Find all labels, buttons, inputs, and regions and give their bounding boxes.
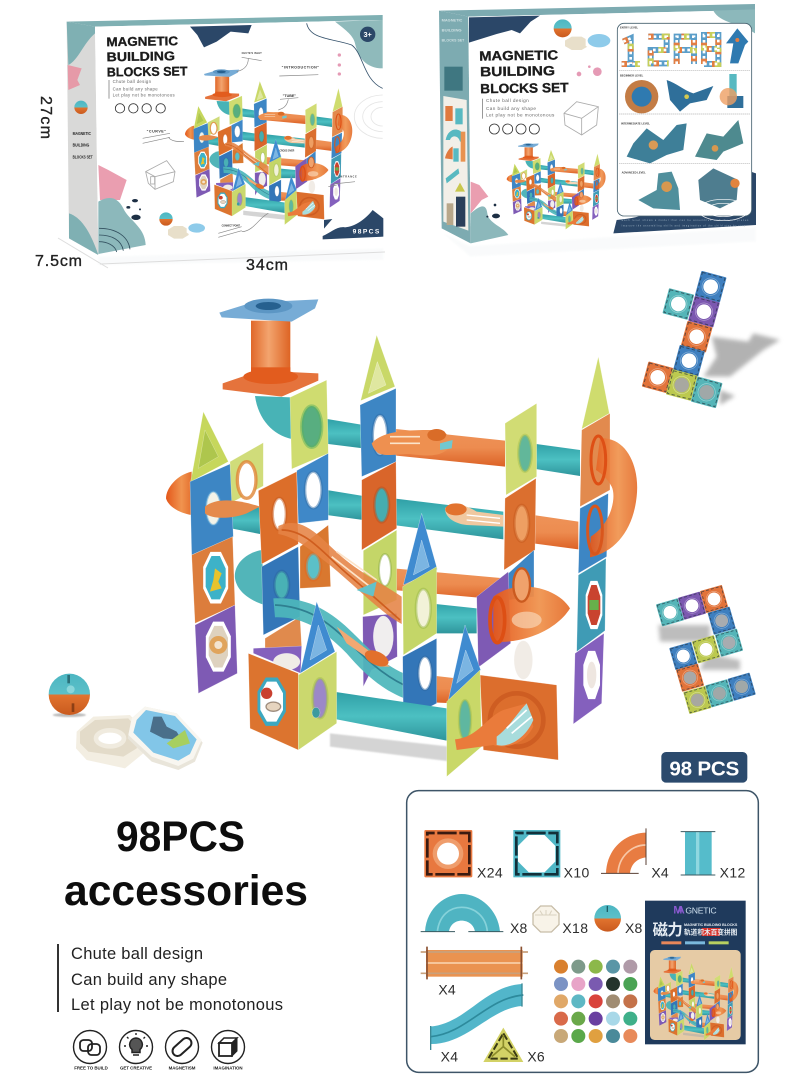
feature list: Can build any shape: [71, 971, 227, 989]
box callouts: [143, 53, 357, 237]
back box title: BUILDING: [480, 63, 555, 79]
instruction booklet: MAGNETIC BUILDING BLOCKS: [684, 923, 738, 927]
play level panel: [617, 23, 752, 221]
quantity labels: X4: [441, 1049, 458, 1065]
play level panel: ADVANCED LEVEL: [622, 171, 646, 175]
back box dice sketch: [564, 102, 598, 135]
icon captions: FREE TO BUILD: [74, 1066, 108, 1070]
left wall panels: [190, 412, 263, 693]
tiles: [656, 585, 756, 714]
back box fine print: Improve the assembling skills and imagination of the child step by step: [622, 225, 746, 228]
back box feature list: Chute ball design: [486, 98, 529, 103]
icon captions: GET CREATIVE: [120, 1066, 152, 1070]
back box feature list: Let play not be monotonous: [486, 113, 555, 118]
back box feature list: Can build any shape: [486, 106, 536, 111]
back box feature list: [482, 98, 555, 119]
icon: free to build: [74, 1030, 106, 1064]
box callouts: ENTRANCE: [338, 175, 357, 178]
icon captions: [74, 1066, 243, 1070]
box callouts: CROSS OVER: [279, 150, 295, 152]
box feature list: [109, 79, 175, 99]
panel: parts list: [407, 791, 758, 1072]
play level panel: INTERMEDIATE LEVEL: [621, 121, 650, 125]
box callouts: "TUBE": [283, 94, 296, 98]
beginner level models: [625, 74, 743, 113]
box feature list: Can build any shape: [113, 86, 158, 91]
advanced level models: [638, 168, 748, 221]
instruction booklet: MA: [673, 904, 685, 916]
back box side panel: MAGNETIC: [442, 18, 462, 23]
part: teal straight tube: [681, 832, 715, 875]
box title: BLOCKS SET: [107, 64, 188, 80]
icon: magnetism: [166, 1030, 198, 1064]
back box reflection: [443, 227, 756, 257]
instruction booklet: 轨道积木百变拼图: [684, 928, 738, 937]
back box front face: [439, 4, 756, 243]
quantity labels: X6: [527, 1049, 545, 1065]
box side panel: BUILDING: [73, 143, 90, 148]
back box feature icons: [489, 124, 539, 134]
box title: MAGNETIC: [106, 34, 178, 49]
column B panels: [258, 380, 331, 650]
right orange loop: [590, 438, 637, 557]
box title: [106, 34, 188, 80]
part: orange quarter curve: [601, 828, 646, 873]
bottom loop tube: [455, 703, 533, 750]
tile shadow: [703, 333, 780, 405]
tile shadow: [658, 625, 740, 670]
feature list: Chute ball design: [71, 945, 203, 963]
box: front view with dimensions: [67, 15, 383, 265]
instruction booklet: GNETIC: [685, 905, 717, 915]
sticker lid: [128, 707, 203, 770]
dimension labels: 7.5cm: [35, 253, 82, 270]
tiles: [642, 271, 727, 408]
marble ball: [49, 674, 90, 717]
orange and teal slides: [273, 523, 413, 701]
back box fine print: Each level shows a model that can be assembled with the set pieces: [622, 219, 749, 222]
back box accessory ball and tray: [554, 19, 612, 51]
front right panels with loop: [447, 625, 558, 777]
back box mini marble run: [507, 143, 606, 229]
intermediate level models: [627, 120, 743, 163]
digits built from tiles: [622, 35, 718, 64]
box feature icons: [115, 104, 165, 113]
heading: 98PCS accessories: accessories: [64, 867, 308, 915]
part: orange straight track: [421, 947, 528, 979]
dimension labels: [35, 96, 385, 274]
left orange dome: [166, 472, 192, 515]
play level panel: BEGINNER LEVEL: [620, 73, 644, 77]
quantity labels: X8: [625, 920, 643, 936]
dimension labels: 27cm: [37, 96, 54, 139]
back box side panel: BLOCKS SET: [442, 38, 465, 43]
part: teal arch: [421, 894, 503, 932]
quantity labels: X4: [438, 981, 456, 997]
central orange dome: [490, 568, 570, 643]
icon captions: IMAGINATION: [213, 1066, 243, 1070]
tube ball tracks: [205, 429, 503, 527]
quantity labels: X24: [477, 864, 503, 880]
box callouts: CHUTE'S INLET: [242, 53, 262, 55]
back box side panel: [439, 11, 471, 243]
column C panels: [360, 335, 397, 687]
back box title: [479, 47, 569, 96]
box dice sketch: [146, 161, 175, 189]
heading: 98PCS accessories: [64, 813, 308, 915]
feature list: Let play not be monotonous: [71, 996, 283, 1014]
top plate and column: [219, 299, 318, 439]
centre panels: [403, 513, 511, 721]
box side panel: MAGNETIC: [73, 131, 91, 136]
quantity labels: X12: [720, 864, 746, 880]
box: back view: [439, 4, 756, 257]
box feature list: Chute ball design: [113, 79, 152, 84]
rear tubes: [203, 418, 580, 703]
sticker sheet: [554, 960, 637, 1043]
box side panel: [67, 22, 98, 255]
part: marble: [594, 905, 621, 932]
column E panels: [573, 357, 610, 724]
left curved teal tube: [235, 550, 265, 605]
back box title: BLOCKS SET: [480, 80, 569, 96]
quantity labels: X10: [564, 864, 590, 880]
box callouts: CONNECT POINT: [222, 226, 241, 228]
box title: BUILDING: [107, 49, 175, 64]
box accessory ball and tray: [159, 212, 207, 239]
box callouts: "INTRODUCTION": [282, 66, 319, 70]
column D panels: [504, 403, 537, 679]
icon captions: MAGNETISM: [169, 1066, 196, 1070]
main marble run model: [166, 299, 637, 777]
instruction booklet: 磁力: [653, 921, 683, 939]
loose ball and storage tray: [49, 674, 203, 770]
instruction booklet: [645, 901, 746, 1044]
quantity labels: X8: [510, 920, 528, 936]
dimension labels: 34cm: [246, 257, 288, 274]
back box title: MAGNETIC: [479, 48, 559, 64]
box side panel: BLOCKS SET: [73, 154, 93, 159]
feature list: [57, 944, 283, 1014]
open tray: [76, 715, 145, 768]
quantity labels: [438, 864, 746, 1065]
ground shadow: [330, 733, 452, 762]
heading: 98PCS accessories: 98PCS: [116, 813, 245, 861]
badge: 98 PCS: [661, 752, 747, 783]
loose tile figure one: [642, 271, 780, 408]
mini marble run on box: [185, 69, 352, 225]
part: triangle tile: [483, 1028, 523, 1062]
part: teal square tile: [513, 830, 560, 877]
box callouts: "CURVE": [147, 129, 166, 133]
age badge: [360, 27, 375, 42]
bottom long teal tube: [332, 692, 447, 741]
box front face: [67, 15, 383, 255]
icon: imagination: [212, 1030, 244, 1064]
quantity labels: X4: [651, 864, 669, 880]
age badge: 3+: [363, 30, 372, 39]
feature icons: [74, 1030, 244, 1070]
box bottom label: 98PCS: [353, 229, 380, 236]
quantity labels: X18: [562, 920, 588, 936]
back box fine print: [622, 219, 749, 228]
loose tile figure two: [656, 585, 756, 714]
box feature list: Let play not be monotonous: [113, 93, 175, 98]
play level panel: ENTRY LEVEL: [620, 25, 639, 29]
back box side panel: BUILDING: [442, 28, 462, 33]
front left cube: [248, 602, 337, 750]
part: octagon base: [533, 906, 559, 932]
badge: 98 PCS: 98 PCS: [669, 757, 739, 780]
box reflection: [98, 248, 383, 265]
icon: get creative: [120, 1030, 152, 1064]
part: orange square tile: [424, 830, 472, 877]
part: teal curved slide: [430, 983, 523, 1050]
left panel stickers: [203, 552, 231, 672]
